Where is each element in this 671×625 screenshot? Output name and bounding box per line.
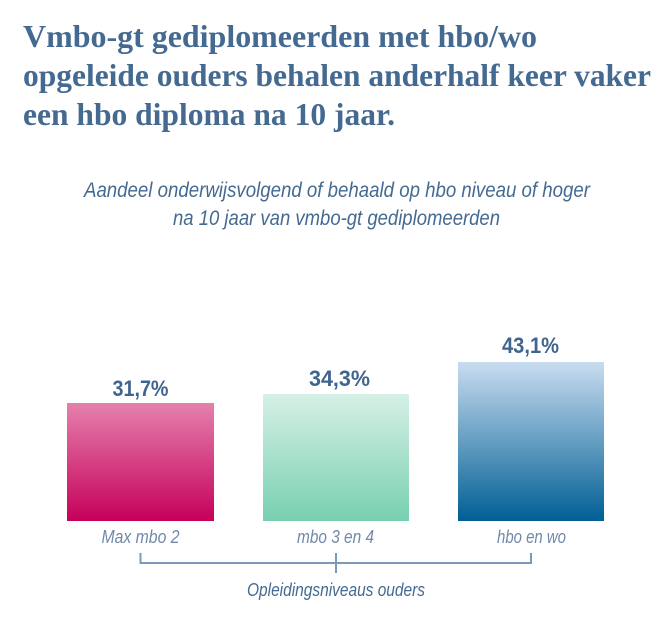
title: Vmbo-gt gediplomeerden met hbo/wo [23, 18, 537, 54]
bar: Max mbo 2: 31,7% [112, 376, 168, 401]
bar: hbo en wo [458, 333, 604, 547]
bracket lines [140, 553, 531, 573]
bar chart [67, 333, 604, 547]
subtitle [82, 179, 591, 230]
title: opgeleide ouders behalen anderhalf keer vaker [23, 57, 651, 93]
axis label: Opleidingsniveaus ouders [247, 580, 425, 600]
bar: mbo 3 en 4 [263, 366, 409, 547]
bar: mbo 3 en 4: 34,3% [309, 366, 370, 391]
bar: Max mbo 2: Max mbo 2 [102, 527, 180, 547]
title: een hbo diploma na 10 jaar. [23, 96, 395, 132]
title [23, 18, 651, 132]
subtitle: na 10 jaar van vmbo-gt gediplomeerden [173, 207, 500, 230]
bar: hbo en wo: hbo en wo [497, 527, 566, 547]
subtitle: Aandeel onderwijsvolgend of behaald op hbo niveau of hoger [82, 179, 591, 202]
bar: Max mbo 2 [67, 376, 214, 547]
bar: mbo 3 en 4: mbo 3 en 4 [297, 527, 374, 547]
bar: hbo en wo: 43,1% [502, 333, 559, 358]
